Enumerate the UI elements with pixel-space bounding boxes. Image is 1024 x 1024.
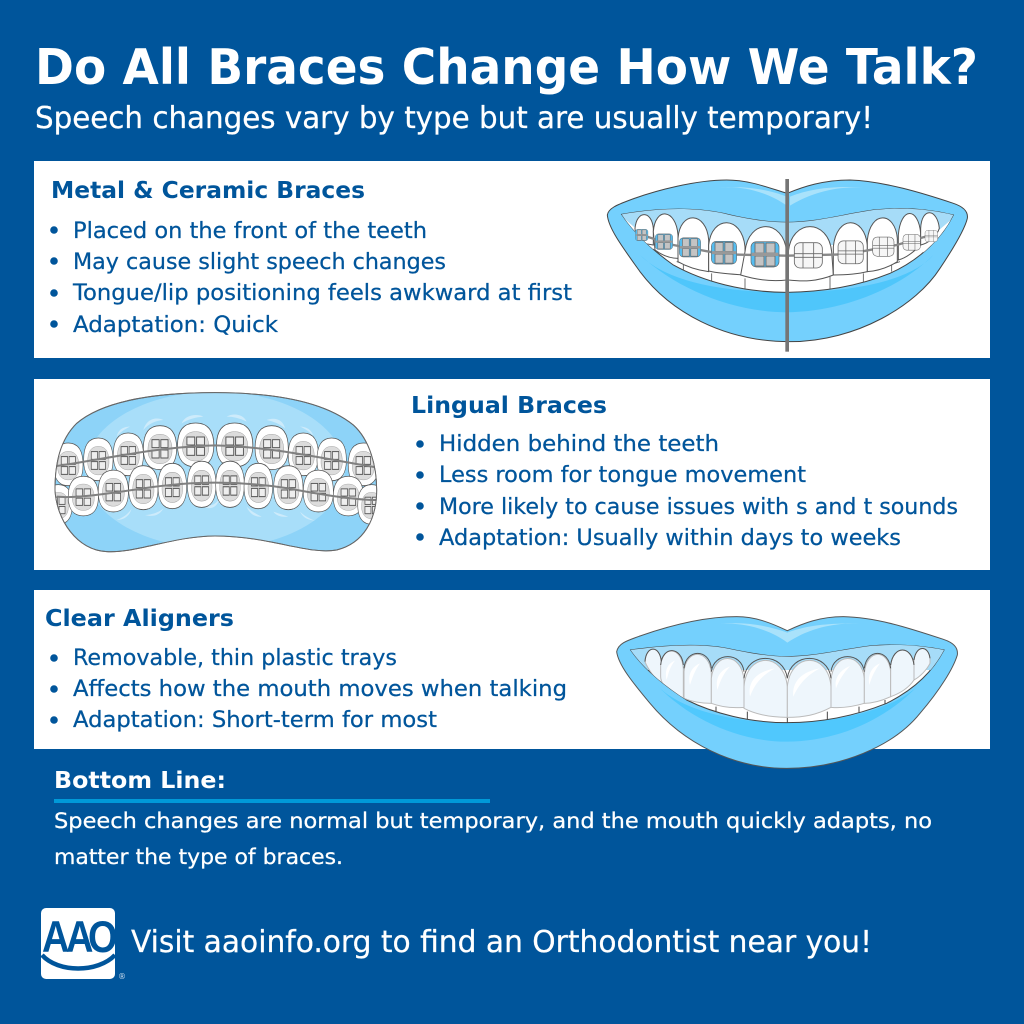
heading: clear aligners: Clear Aligners: [45, 604, 234, 632]
logo: ®: [118, 972, 126, 981]
heading: metal and ceramic: Metal & Ceramic Braces: [51, 176, 365, 204]
bullet list: metal and ceramic: Placed on the front of the teeth: [73, 219, 427, 244]
logo: [41, 908, 126, 981]
footer call to action: Visit aaoinfo.org to find an Orthodontist near you!: [131, 925, 872, 960]
illustration: smile with metal and ceramic braces: [607, 179, 967, 352]
title: Do All Braces Change How We Talk?: [35, 39, 978, 96]
bullet list: clear aligners: Removable, thin plastic trays: [73, 646, 397, 671]
bullet list: clear aligners: Affects how the mouth moves when talking: [73, 677, 567, 702]
bottom line text: [54, 809, 932, 869]
bullet list: metal and ceramic: [50, 219, 572, 338]
bullet list: clear aligners: [50, 646, 567, 733]
bullet list: metal and ceramic: Adaptation: Quick: [73, 313, 278, 338]
bullet list: lingual: [416, 432, 958, 551]
heading: lingual: Lingual Braces: [411, 391, 607, 419]
bullet list: lingual: Adaptation: Usually within days to weeks: [439, 526, 901, 551]
subtitle: Speech changes vary by type but are usually temporary!: [35, 101, 873, 136]
divider: [54, 799, 490, 803]
logo: AAO: [42, 912, 118, 962]
bottom line text: matter the type of braces.: [54, 845, 343, 869]
bullet list: lingual: More likely to cause issues with s and t sounds: [439, 495, 958, 520]
bullet list: clear aligners: Adaptation: Short-term for most: [73, 708, 437, 733]
bottom line text: Speech changes are normal but temporary, and the mouth quickly adapts, no: [54, 809, 932, 833]
panel: lingual braces: [34, 379, 990, 570]
panel: clear aligners: [34, 590, 990, 749]
bullet list: metal and ceramic: May cause slight speech changes: [73, 250, 446, 275]
bullet list: lingual: Hidden behind the teeth: [439, 432, 719, 457]
panel: metal and ceramic braces: [34, 161, 990, 358]
bullet list: metal and ceramic: Tongue/lip positioning feels awkward at first: [72, 281, 572, 306]
bullet list: lingual: Less room for tongue movement: [439, 463, 806, 488]
illustration: smile with clear aligners: [617, 617, 957, 768]
illustration: lingual braces arches: [44, 392, 386, 552]
bottom line heading: Bottom Line:: [54, 766, 226, 794]
